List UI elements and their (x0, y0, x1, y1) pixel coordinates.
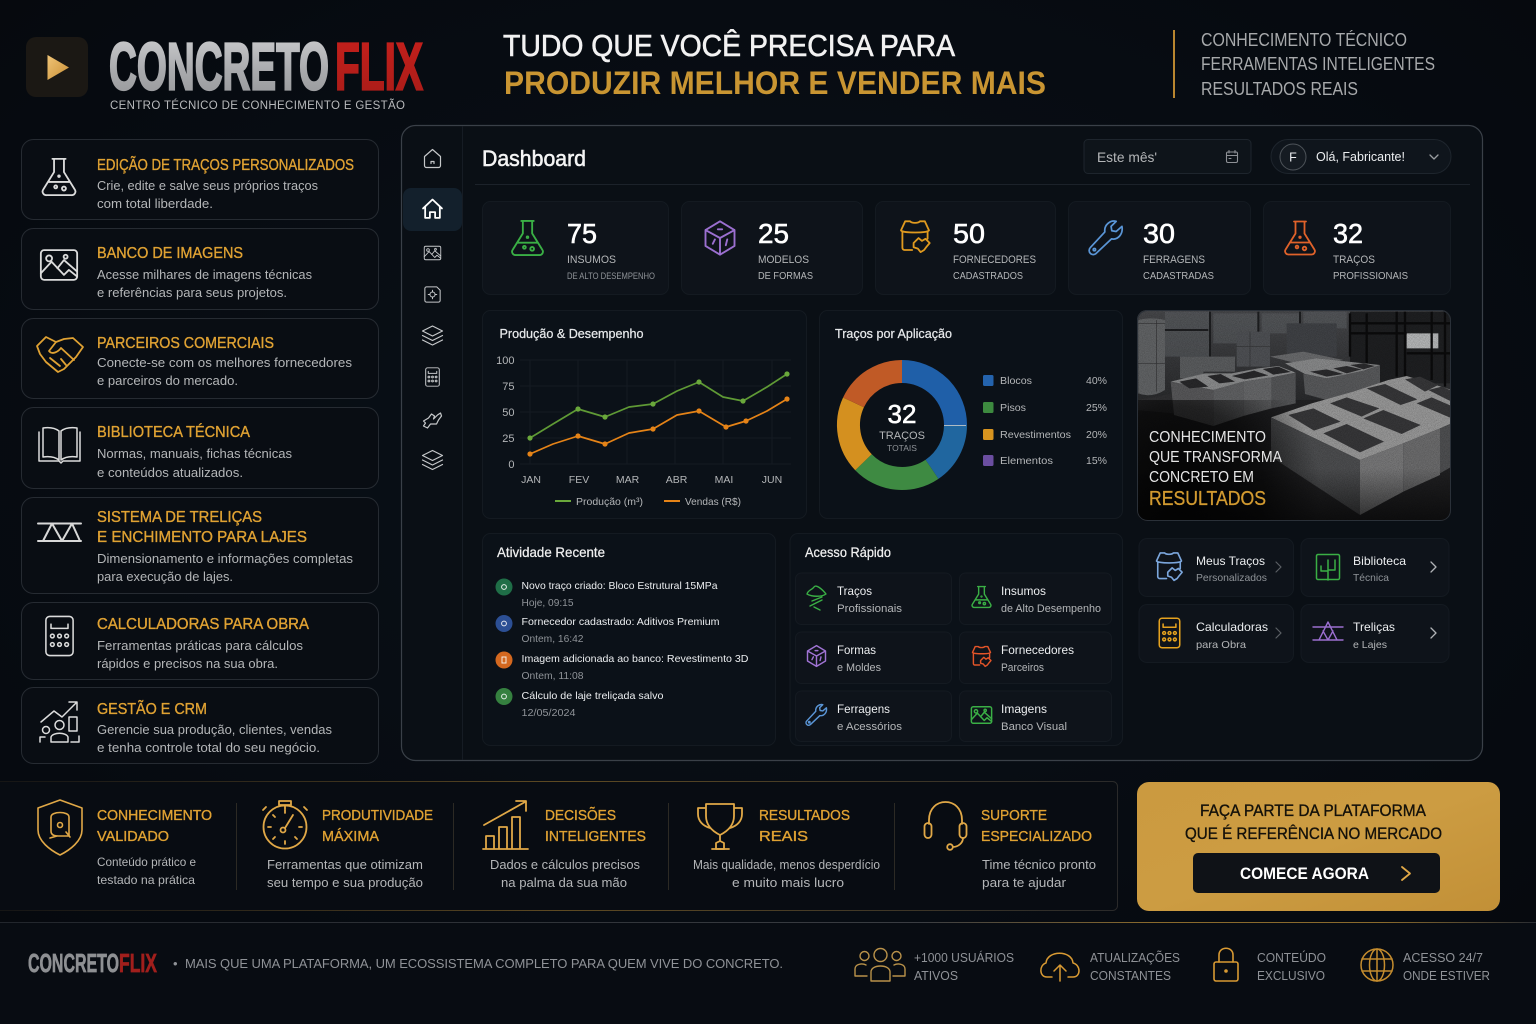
panel: dashboard (402, 126, 1482, 760)
benefit: decisões inteligentes: na palma da sua mão (501, 875, 627, 890)
stat card: modelos: DE FORMAS (758, 271, 813, 282)
quick link: traços: Traços (837, 584, 872, 598)
footer tagline: MAIS QUE UMA PLATAFORMA, UM ECOSSISTEMA COMPLETO PARA QUEM VIVE DO CONCRETO. (185, 956, 783, 971)
button: comece agora: COMECE AGORA (1240, 864, 1369, 883)
feature: banco de imagens (22, 228, 378, 310)
photo panel: concrete blocks (1137, 310, 1453, 533)
stat card: insumos: INSUMOS (567, 254, 616, 266)
stat card: modelos: 25 (758, 218, 789, 249)
stat card: fornecedores: 50 (953, 218, 985, 249)
quick link: traços: Profissionais (837, 603, 903, 615)
stat card: traços: PROFISSIONAIS (1333, 271, 1408, 282)
donut legend: Elementos (1000, 455, 1053, 467)
activity item 2: Ontem, 16:42 (522, 634, 584, 645)
feature: calculadoras: rápidos e precisos na sua obra. (97, 656, 278, 671)
feature: edição de traços (22, 140, 378, 220)
line chart: produção e desempenho (482, 310, 806, 518)
footer tagline: • (173, 956, 178, 971)
feature: sistema de treliças (22, 498, 378, 594)
feature: banco de imagens: Acesse milhares de imagens técnicas (97, 267, 312, 282)
footer item: acesso 24/7: ACESSO 24/7 (1403, 950, 1483, 965)
footer item: atualizações: ATUALIZAÇÕES (1090, 950, 1180, 965)
donut legend: 25% (1086, 402, 1107, 414)
activity item 2: Fornecedor cadastrado: Aditivos Premium (522, 616, 720, 628)
period filter (1084, 140, 1251, 174)
feature: parceiros comerciais: Conecte-se com os melhores fornecedores (97, 355, 353, 370)
panel: atividade recente (482, 534, 776, 746)
stat card: traços: 32 (1333, 218, 1363, 249)
feature: calculadoras (22, 602, 378, 680)
donut legend: 15% (1086, 455, 1107, 467)
feature: parceiros comerciais: e parceiros do mercado. (97, 373, 238, 388)
icon: play button (26, 37, 88, 97)
shortcut: biblioteca: Biblioteca (1353, 554, 1406, 568)
benefit: decisões inteligentes (483, 801, 646, 890)
call to action: QUE É REFERÊNCIA NO MERCADO (1185, 824, 1442, 843)
feature: biblioteca técnica: BIBLIOTECA TÉCNICA (97, 424, 251, 441)
footer item: acesso 24/7: ONDE ESTIVER (1403, 968, 1490, 983)
feature: edição de traços: EDIÇÃO DE TRAÇOS PERSONALIZADOS (97, 157, 354, 174)
benefits strip (0, 781, 1118, 911)
chart legend (555, 496, 741, 508)
footer logo: FLIX (119, 948, 157, 978)
y axis labels: 0 (508, 459, 514, 471)
photo caption: QUE TRANSFORMA (1149, 449, 1282, 466)
photo caption: CONHECIMENTO (1149, 429, 1266, 446)
y axis labels: 100 (496, 355, 514, 367)
benefit: produtividade máxima (263, 801, 433, 890)
x axis labels: JUN (762, 474, 782, 486)
quick link: formas: e Moldes (837, 662, 881, 674)
donut centre label (879, 399, 925, 453)
stat card: traços (1264, 202, 1450, 294)
feature: gestão e crm: Gerencie sua produção, clientes, vendas (97, 722, 332, 737)
activity item 3: Ontem, 11:08 (522, 671, 584, 682)
button: comece agora (1193, 853, 1440, 893)
x axis labels (521, 474, 782, 486)
benefit: decisões inteligentes: DECISÕES (545, 807, 616, 824)
donut legend: Pisos (1000, 402, 1026, 414)
call to action (1137, 782, 1500, 911)
x axis labels: MAR (616, 474, 640, 486)
donut legend: Revestimentos (1000, 429, 1071, 441)
shortcut: biblioteca: Técnica (1353, 572, 1389, 584)
x axis labels: FEV (569, 474, 589, 486)
footer (0, 922, 1536, 1024)
chart legend: Vendas (R$) (685, 496, 741, 508)
feature: sistema de treliças: para execução de lajes. (97, 569, 233, 584)
feature: biblioteca técnica: Normas, manuais, fichas técnicas (97, 446, 292, 461)
benefit: suporte especializado: ESPECIALIZADO (981, 829, 1092, 845)
shortcut: biblioteca (1301, 538, 1449, 596)
donut chart: traços por aplicação (820, 310, 1122, 518)
feature: banco de imagens: BANCO DE IMAGENS (97, 245, 243, 262)
quick link: fornecedores (960, 632, 1112, 684)
logo wordmark: CONCRETO (109, 30, 329, 104)
shortcut: meus traços: Meus Traços (1196, 554, 1265, 568)
header: logo (26, 30, 423, 112)
header right pillars (1173, 30, 1435, 99)
benefit: produtividade máxima: PRODUTIVIDADE (322, 808, 433, 824)
benefit: resultados reais (693, 804, 880, 890)
stat card: ferragens (1068, 202, 1250, 294)
stat card: fornecedores: CADASTRADOS (953, 271, 1023, 282)
benefit: suporte especializado: para te ajudar (982, 875, 1067, 890)
benefit: suporte especializado: Time técnico pronto (982, 857, 1096, 872)
stat card: insumos: 75 (567, 218, 597, 249)
y axis labels (496, 355, 514, 471)
benefit: conhecimento validado: Conteúdo prático e (97, 855, 196, 869)
benefit: produtividade máxima: seu tempo e sua produção (267, 875, 423, 890)
feature: parceiros comerciais: PARCEIROS COMERCIAIS (97, 335, 274, 352)
dashboard heading: Dashboard (482, 146, 586, 171)
footer logo: CONCRETO (28, 948, 119, 978)
series: vendas (527, 396, 790, 457)
benefit: produtividade máxima: Ferramentas que otimizam (267, 857, 423, 872)
activity item 1 (496, 578, 718, 609)
feature: edição de traços: com total liberdade. (97, 196, 213, 211)
photo caption: RESULTADOS (1149, 488, 1266, 510)
feature: sistema de treliças: Dimensionamento e informações completas (97, 551, 353, 566)
benefit: suporte especializado (924, 802, 1096, 890)
stat card: ferragens: CADASTRADAS (1143, 271, 1214, 282)
benefit: resultados reais: RESULTADOS (759, 808, 850, 824)
benefit: suporte especializado: SUPORTE (981, 808, 1047, 824)
header right pillars: RESULTADOS REAIS (1201, 79, 1358, 99)
headline: PRODUZIR MELHOR E VENDER MAIS (504, 65, 1046, 101)
shortcut: calculadoras: Calculadoras (1196, 620, 1268, 634)
shortcut: treliças: e Lajes (1353, 639, 1387, 651)
feature: parceiros comerciais (22, 318, 378, 398)
benefit: conhecimento validado (38, 800, 212, 887)
donut legend: 20% (1086, 429, 1107, 441)
logo tagline: CENTRO TÉCNICO DE CONHECIMENTO E GESTÃO (110, 99, 405, 112)
feature: gestão e crm: e tenha controle total do seu negócio. (97, 740, 320, 755)
quick link: insumos: Insumos (1001, 584, 1046, 598)
benefit: produtividade máxima: MÁXIMA (322, 828, 379, 845)
donut ring (848, 371, 966, 479)
footer item: usuários: +1000 USUÁRIOS (914, 950, 1014, 965)
feature: edição de traços: Crie, edite e salve seus próprios traços (97, 178, 318, 193)
activity item 3 (496, 652, 749, 682)
quick link: ferragens: e Acessórios (837, 721, 903, 733)
activity item 1: Novo traço criado: Bloco Estrutural 15MPa (522, 580, 718, 592)
shortcut: meus traços: Personalizados (1196, 572, 1267, 584)
donut legend: Blocos (1000, 375, 1032, 387)
footer item: usuários: ATIVOS (914, 968, 958, 983)
benefit: resultados reais: REAIS (759, 829, 808, 845)
quick link: ferragens: Ferragens (837, 702, 890, 716)
shortcut: meus traços (1139, 538, 1294, 596)
feature: biblioteca técnica: e conteúdos atualizados. (97, 465, 243, 480)
feature: gestão e crm (22, 688, 378, 764)
feature: gestão e crm: GESTÃO E CRM (97, 701, 207, 718)
shortcut: calculadoras: para Obra (1196, 639, 1246, 651)
photo caption: CONCRETO EM (1149, 469, 1254, 486)
footer item: acesso 24/7 (1361, 949, 1490, 983)
x axis labels: MAI (715, 474, 733, 486)
feature: banco de imagens: e referências para seus projetos. (97, 285, 287, 300)
stat card: modelos (682, 202, 862, 294)
benefit: conhecimento validado: VALIDADO (97, 829, 169, 845)
shortcut: treliças (1301, 604, 1449, 662)
feature: sistema de treliças: SISTEMA DE TRELIÇAS (97, 509, 262, 526)
chart title: Produção & Desempenho (500, 326, 644, 341)
donut centre label: 32 (888, 399, 916, 429)
stat card: fornecedores: FORNECEDORES (953, 254, 1036, 266)
activity item 2 (496, 615, 720, 645)
activity item 1: Hoje, 09:15 (522, 598, 574, 609)
quick link: traços (796, 573, 952, 624)
quick link: insumos (960, 573, 1112, 624)
quick link: insumos: de Alto Desempenho (1001, 603, 1101, 615)
shortcut: calculadoras (1139, 604, 1294, 662)
panel: acesso rápido: Acesso Rápido (805, 544, 891, 560)
footer item: usuários (855, 948, 1014, 983)
activity item 3: Imagem adicionada ao banco: Revestimento 3D (522, 653, 749, 665)
shortcut: treliças: Treliças (1353, 620, 1395, 634)
donut centre label: TRAÇOS (879, 430, 925, 442)
benefit: resultados reais: Mais qualidade, menos desperdício (693, 857, 880, 872)
stat card: fornecedores (876, 202, 1056, 294)
benefit: resultados reais: e muito mais lucro (732, 875, 844, 890)
footer item: conteúdo exclusivo (1214, 948, 1326, 983)
y axis labels: 25 (502, 433, 514, 445)
quick link: formas: Formas (837, 643, 876, 657)
panel: acesso rápido (790, 534, 1122, 746)
activity item 4: Cálculo de laje treliçada salvo (522, 690, 664, 702)
header right pillars: FERRAMENTAS INTELIGENTES (1201, 54, 1435, 74)
panel: atividade recente: Atividade Recente (497, 544, 605, 560)
chart legend: Produção (m³) (576, 496, 643, 508)
benefit: conhecimento validado: CONHECIMENTO (97, 808, 212, 824)
quick link: imagens (960, 691, 1112, 742)
stat card: ferragens: 30 (1143, 218, 1175, 249)
footer item: conteúdo exclusivo: CONTEÚDO (1257, 950, 1326, 965)
quick link: ferragens (796, 691, 952, 742)
feature: calculadoras: CALCULADORAS PARA OBRA (97, 616, 310, 633)
y axis labels: 50 (502, 407, 514, 419)
benefit: decisões inteligentes: INTELIGENTES (545, 829, 646, 845)
feature: calculadoras: Ferramentas práticas para cálculos (97, 638, 304, 653)
y axis labels: 75 (502, 381, 514, 393)
quick link: fornecedores: Parceiros (1001, 662, 1044, 674)
activity item 4: 12/05/2024 (522, 708, 576, 719)
quick link: imagens: Banco Visual (1001, 721, 1067, 733)
activity item 4 (496, 688, 664, 719)
user pill (1271, 140, 1451, 174)
donut centre label: TOTAIS (887, 443, 917, 453)
footer item: atualizações (1041, 950, 1180, 983)
benefit: decisões inteligentes: Dados e cálculos precisos (490, 857, 640, 872)
panel: left feature list (22, 140, 378, 764)
x axis labels: JAN (521, 474, 541, 486)
stat card: modelos: MODELOS (758, 254, 809, 266)
footer item: atualizações: CONSTANTES (1090, 968, 1171, 983)
sidebar navigation (403, 150, 462, 470)
stat card: insumos: DE ALTO DESEMPENHO (567, 271, 655, 282)
x axis labels: ABR (666, 474, 688, 486)
footer item: conteúdo exclusivo: EXCLUSIVO (1257, 968, 1325, 983)
user pill: F (1289, 150, 1297, 164)
feature: biblioteca técnica (22, 408, 378, 488)
period filter: Este mês' (1097, 149, 1157, 165)
donut title: Traços por Aplicação (835, 326, 952, 341)
call to action: FAÇA PARTE DA PLATAFORMA (1200, 801, 1427, 820)
photo caption (1149, 429, 1282, 510)
quick link: fornecedores: Fornecedores (1001, 643, 1074, 657)
feature: sistema de treliças: E ENCHIMENTO PARA LAJES (97, 529, 307, 546)
stat card: insumos (482, 202, 668, 294)
header right pillars: CONHECIMENTO TÉCNICO (1201, 30, 1407, 50)
user pill: Olá, Fabricante! (1316, 149, 1405, 164)
donut legend (983, 375, 1107, 467)
donut legend: 40% (1086, 375, 1107, 387)
stat card: traços: TRAÇOS (1333, 254, 1375, 266)
quick link: imagens: Imagens (1001, 702, 1047, 716)
benefit: conhecimento validado: testado na prática (97, 873, 195, 887)
headline (503, 28, 1046, 101)
headline: TUDO QUE VOCÊ PRECISA PARA (503, 28, 955, 63)
logo wordmark: FLIX (335, 30, 423, 104)
quick link: formas (796, 632, 952, 684)
series: produção (527, 371, 790, 441)
stat card: ferragens: FERRAGENS (1143, 254, 1205, 266)
